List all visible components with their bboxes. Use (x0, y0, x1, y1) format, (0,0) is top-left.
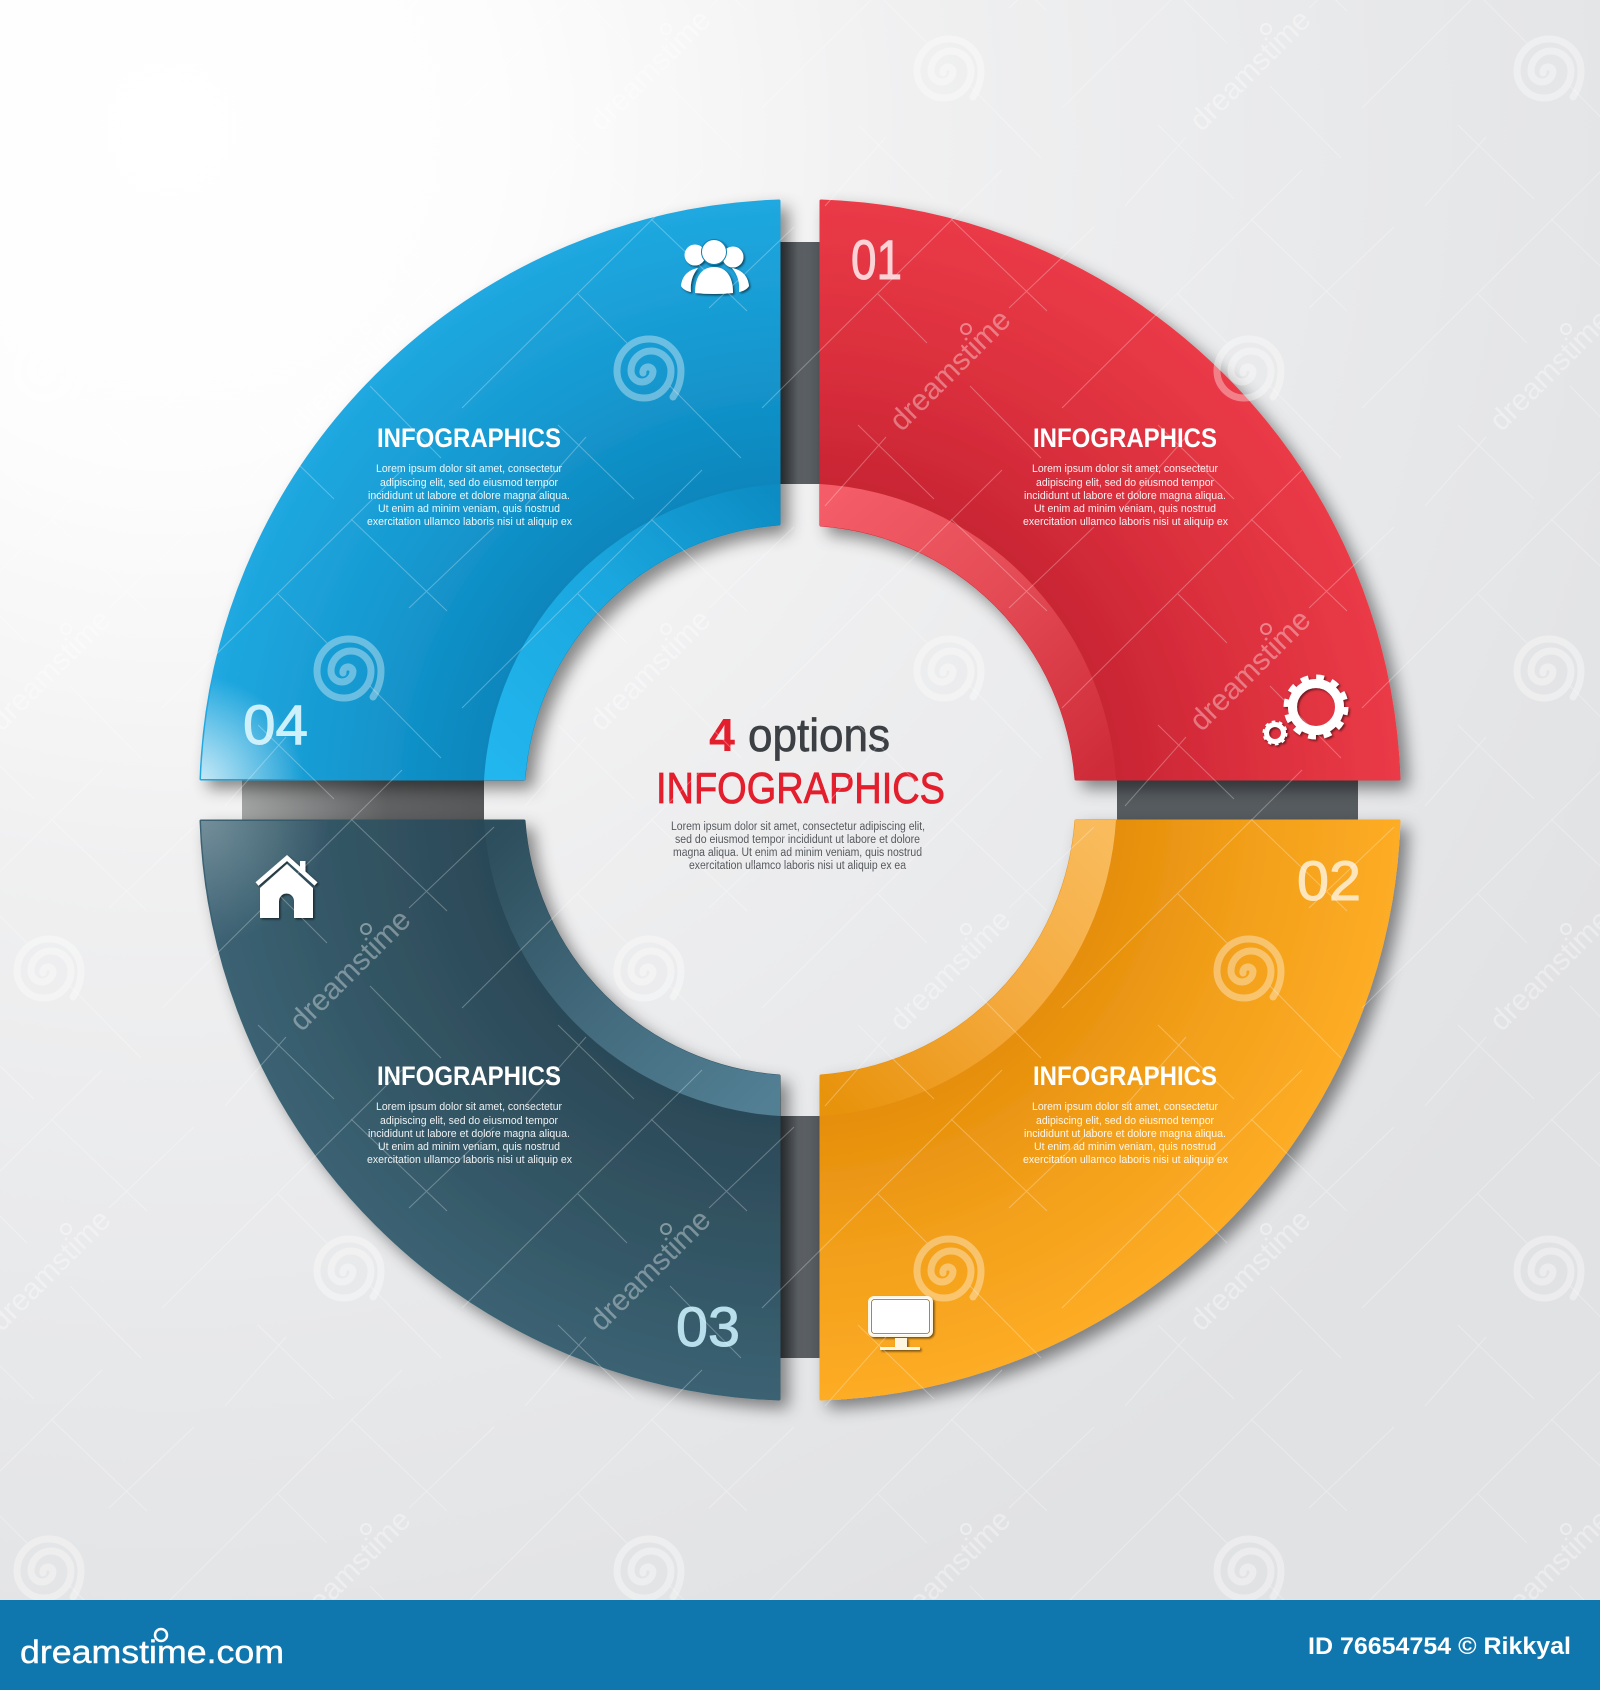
connector: left grey bar (242, 780, 484, 820)
center text block: exercitation ullamco laboris nisi ut aliquip ex ea (689, 860, 907, 872)
text block 01: exercitation ullamco laboris nisi ut aliquip ex (1023, 516, 1228, 528)
text block 04: adipiscing elit, sed do eiusmod tempor (380, 477, 558, 489)
text block 04: Ut enim ad minim veniam, quis nostrud (378, 503, 560, 515)
connector: top grey bar (780, 242, 820, 484)
icon: people (681, 240, 749, 294)
footer image id: ID 76654754 © Rikkyal (1308, 1633, 1571, 1660)
title: infographics: INFOGRAPHICS (656, 764, 945, 813)
heading: infographics 04: INFOGRAPHICS (377, 423, 561, 453)
panel: 03 dark segment (201, 820, 780, 1399)
connector: bottom grey bar (780, 1116, 820, 1358)
number 02: 02 (1297, 849, 1361, 912)
text block 03: adipiscing elit, sed do eiusmod tempor (380, 1115, 558, 1127)
text block 02 (1023, 1101, 1228, 1166)
text block 03: incididunt ut labore et dolore magna aliqua. (368, 1128, 570, 1140)
center text block: magna aliqua. Ut enim ad minim veniam, quis nostrud (673, 847, 922, 859)
text block 04: exercitation ullamco laboris nisi ut aliquip ex (367, 516, 572, 528)
number 01: 01 (851, 228, 902, 291)
watermark: dreamstime text: dreamstime (883, 903, 1017, 1037)
number 03: 03 (676, 1295, 740, 1358)
watermark: dreamstime text: dreamstime (1183, 3, 1317, 137)
watermark: dreamstime text: dreamstime (1183, 603, 1317, 737)
watermark: dreamstime text: dreamstime (883, 303, 1017, 437)
text block 01: Ut enim ad minim veniam, quis nostrud (1034, 503, 1216, 515)
footer logo: dreamstime.com (20, 1634, 284, 1670)
text block 04: incididunt ut labore et dolore magna aliqua. (368, 490, 570, 502)
icon: gears (1264, 678, 1345, 744)
watermark: dreamstime text: dreamstime (283, 303, 417, 437)
heading: infographics 03: INFOGRAPHICS (377, 1061, 561, 1091)
center title (656, 709, 945, 872)
title: 4 options: 4 (709, 709, 735, 761)
text block 02: incididunt ut labore et dolore magna aliqua. (1024, 1128, 1226, 1140)
panel: 04 blue segment (201, 201, 780, 780)
text block 03 (367, 1101, 572, 1166)
watermark: dreamstime text: dreamstime (583, 3, 717, 137)
watermark: dreamstime text: dreamstime (1183, 1203, 1317, 1337)
text block 02: Ut enim ad minim veniam, quis nostrud (1034, 1141, 1216, 1153)
heading: infographics 01: INFOGRAPHICS (1033, 423, 1217, 453)
center text block (671, 821, 925, 872)
center text block: Lorem ipsum dolor sit amet, consectetur adipiscing elit, (671, 821, 925, 833)
watermark: dreamstime text: dreamstime (583, 1203, 717, 1337)
text block 02: exercitation ullamco laboris nisi ut aliquip ex (1023, 1154, 1228, 1166)
panel: 01 red segment (820, 201, 1399, 780)
center text block: sed do eiusmod tempor incididunt ut labore et dolore (675, 834, 920, 846)
number 04: 04 (243, 693, 308, 756)
watermark: dreamstime text: dreamstime (283, 903, 417, 1037)
icon: monitor (869, 1297, 932, 1350)
text block 01: adipiscing elit, sed do eiusmod tempor (1036, 477, 1214, 489)
text block 02: Lorem ipsum dolor sit amet, consectetur (1032, 1101, 1218, 1113)
text block 01: Lorem ipsum dolor sit amet, consectetur (1032, 463, 1218, 475)
text block 04: Lorem ipsum dolor sit amet, consectetur (376, 463, 562, 475)
title: 4 options: options (748, 709, 890, 761)
text block 03: Lorem ipsum dolor sit amet, consectetur (376, 1101, 562, 1113)
text block 03: Ut enim ad minim veniam, quis nostrud (378, 1141, 560, 1153)
text block 04 (367, 463, 572, 528)
icon: house (257, 858, 316, 918)
watermark: dreamstime text: dreamstime (883, 1503, 1017, 1637)
heading: infographics 02: INFOGRAPHICS (1033, 1061, 1217, 1091)
text block 03: exercitation ullamco laboris nisi ut aliquip ex (367, 1154, 572, 1166)
panel: 02 orange segment (820, 820, 1399, 1399)
watermark: dreamstime text: dreamstime (583, 603, 717, 737)
connector: right grey bar (1117, 780, 1358, 820)
footer bar (0, 1600, 1600, 1690)
text block 02: adipiscing elit, sed do eiusmod tempor (1036, 1115, 1214, 1127)
watermark: dreamstime text: dreamstime (283, 1503, 417, 1637)
text block 01: incididunt ut labore et dolore magna aliqua. (1024, 490, 1226, 502)
text block 01 (1023, 463, 1228, 528)
